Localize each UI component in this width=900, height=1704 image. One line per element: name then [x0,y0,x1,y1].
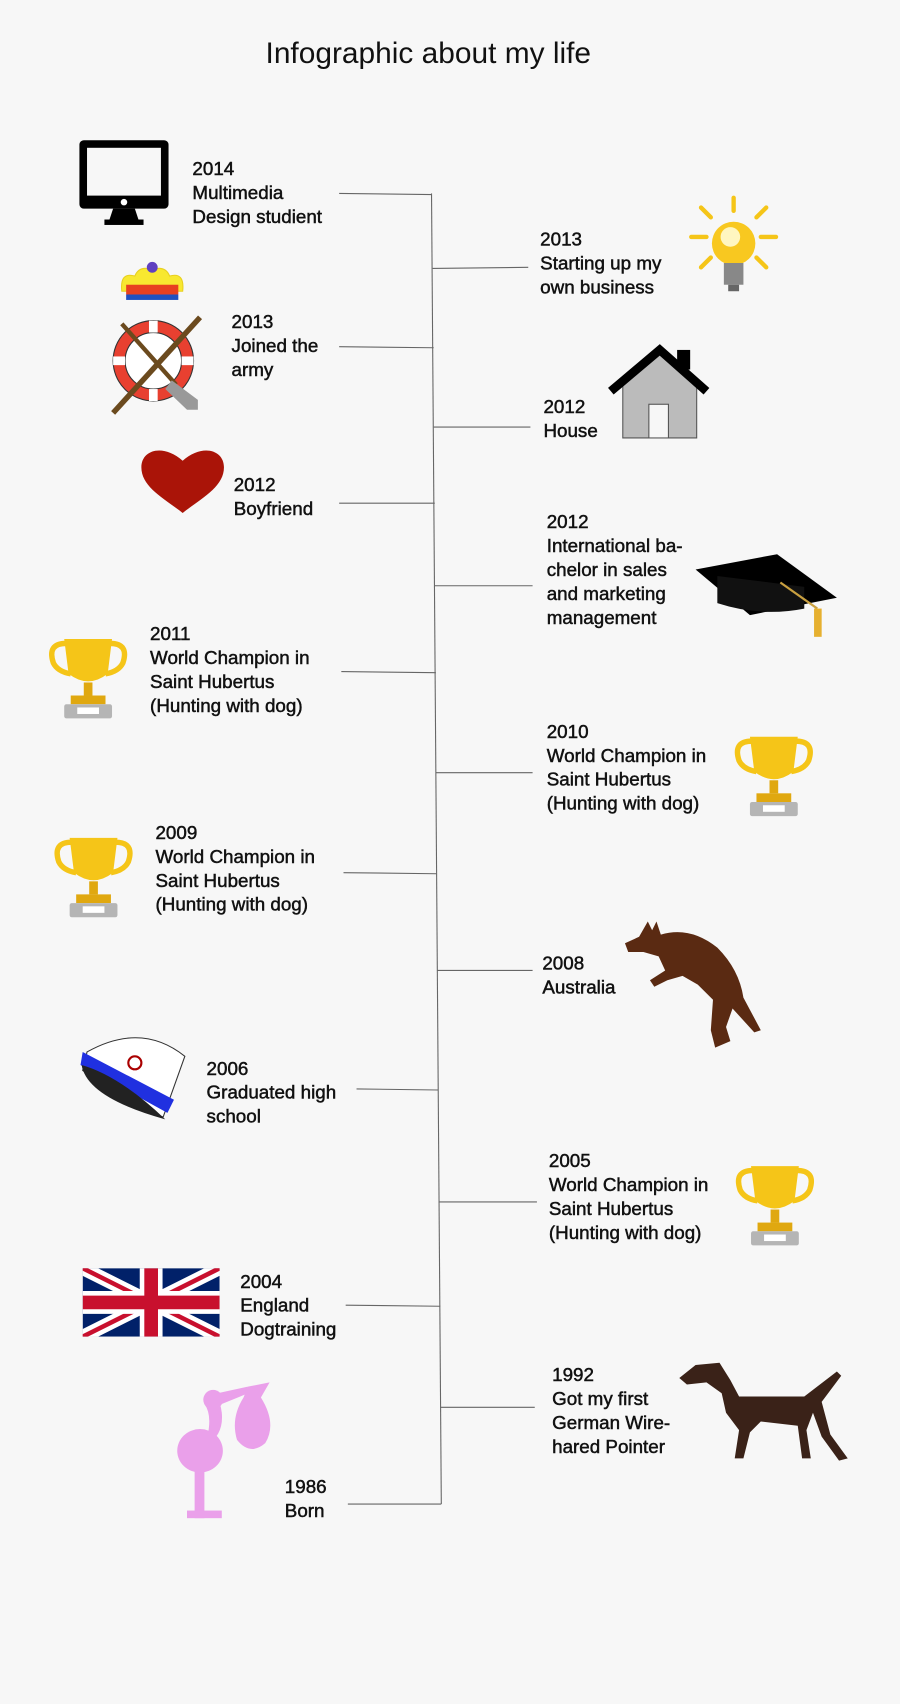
icon: German pointer dog [679,1363,848,1461]
text: 2009: Saint Hubertus [155,870,280,891]
icon: kangaroo [625,922,761,1048]
text: 2011: (Hunting with dog) [150,695,303,716]
text: 1986 [285,1476,327,1521]
text: 2014: Design studient [192,206,323,227]
text: 2004 [240,1271,336,1340]
text: 2011: Saint Hubertus [150,671,274,692]
text: 2014: Multimedia [192,182,284,203]
text: 2013 army [232,311,318,380]
text: 2013 business: own business [540,276,654,297]
text: 1986: Born [285,1500,325,1521]
icon: crown, lifebuoy, rifle, shovel [113,262,200,413]
text: 2006 [207,1058,336,1127]
text: 2005: 2005 [549,1150,591,1171]
text: 2012 house [543,396,598,441]
text: 2013 business: Starting up my [540,253,662,274]
text: 2012 bachelor: and marketing [547,583,666,604]
text: 2012 boyfriend: Boyfriend [234,498,313,519]
text: 2014 [192,158,323,227]
text: 2011: 2011 [150,623,190,644]
text: 2010: 2010 [547,721,589,742]
icon: trophy 2005 [739,1166,811,1245]
icon: house [611,350,706,438]
icon: trophy 2011 [52,639,125,718]
icon: trophy 2009 [57,838,130,917]
text: 1992 [552,1364,670,1457]
text: 2009: World Champion in [155,846,315,867]
text: 2011 [150,623,310,716]
text: 2005 [549,1150,708,1243]
text: 2011: World Champion in [150,647,310,668]
text: 2005: Saint Hubertus [549,1198,673,1219]
text: 2012 boyfriend: 2012 [234,474,276,495]
text: 2014: 2014 [192,158,234,179]
text: 2012 house: House [543,420,598,441]
text: 2006: 2006 [207,1058,248,1079]
icon: graduation cap [696,554,837,637]
text: 2010: Saint Hubertus [547,769,671,790]
text: 2006: Graduated high [207,1082,336,1103]
text: 2012 house: 2012 [543,396,585,417]
text: 2013 army: 2013 [232,311,273,332]
text: 2013 business: 2013 [540,229,582,250]
text: 2012 bachelor: chelor in sales [547,559,667,580]
icon: student cap [81,1038,185,1119]
icon: stork with baby bundle [177,1382,270,1518]
timeline spine [339,193,537,1504]
icon: heart [141,451,224,513]
text: 2013 army: Joined the [232,335,318,356]
text: 2010: (Hunting with dog) [547,793,699,814]
text: 2009: 2009 [155,822,197,843]
text: 2009: (Hunting with dog) [155,894,308,915]
text: 2012 boyfriend [234,474,313,519]
text: 2004: England [240,1295,309,1316]
text: 2004: Dogtraining [240,1319,336,1340]
text: 2005: (Hunting with dog) [549,1222,701,1243]
text: 2012 bachelor [547,511,683,628]
text: 2010: World Champion in [547,745,706,766]
text: 2012 bachelor: International ba- [547,535,683,556]
text: 2010 [547,721,706,814]
text: 2004: 2004 [240,1271,282,1292]
title: Infographic about my life [266,37,591,70]
text: 2008: Australia [542,976,616,997]
text: 2009 [155,822,315,915]
icon: trophy 2010 [737,737,810,816]
text: 2008 [542,952,616,997]
text: 1992: German Wire- [552,1412,670,1433]
icon: UK flag [83,1268,220,1337]
text: 2008: 2008 [542,952,584,973]
icon: monitor [79,140,169,225]
icon: light bulb [691,198,776,291]
text: 1992: hared Pointer [552,1436,665,1457]
text: 2005: World Champion in [549,1174,708,1195]
text: 1992: Got my first [552,1388,649,1409]
text: 2012 bachelor: management [547,607,657,628]
text: 2012 bachelor: 2012 [547,511,589,532]
text: 1986: 1986 [285,1476,327,1497]
text: 2006: school [207,1106,261,1127]
text: 1992: 1992 [552,1364,594,1385]
text: 2013 army: army [232,359,274,380]
text: 2013 business [540,229,662,297]
